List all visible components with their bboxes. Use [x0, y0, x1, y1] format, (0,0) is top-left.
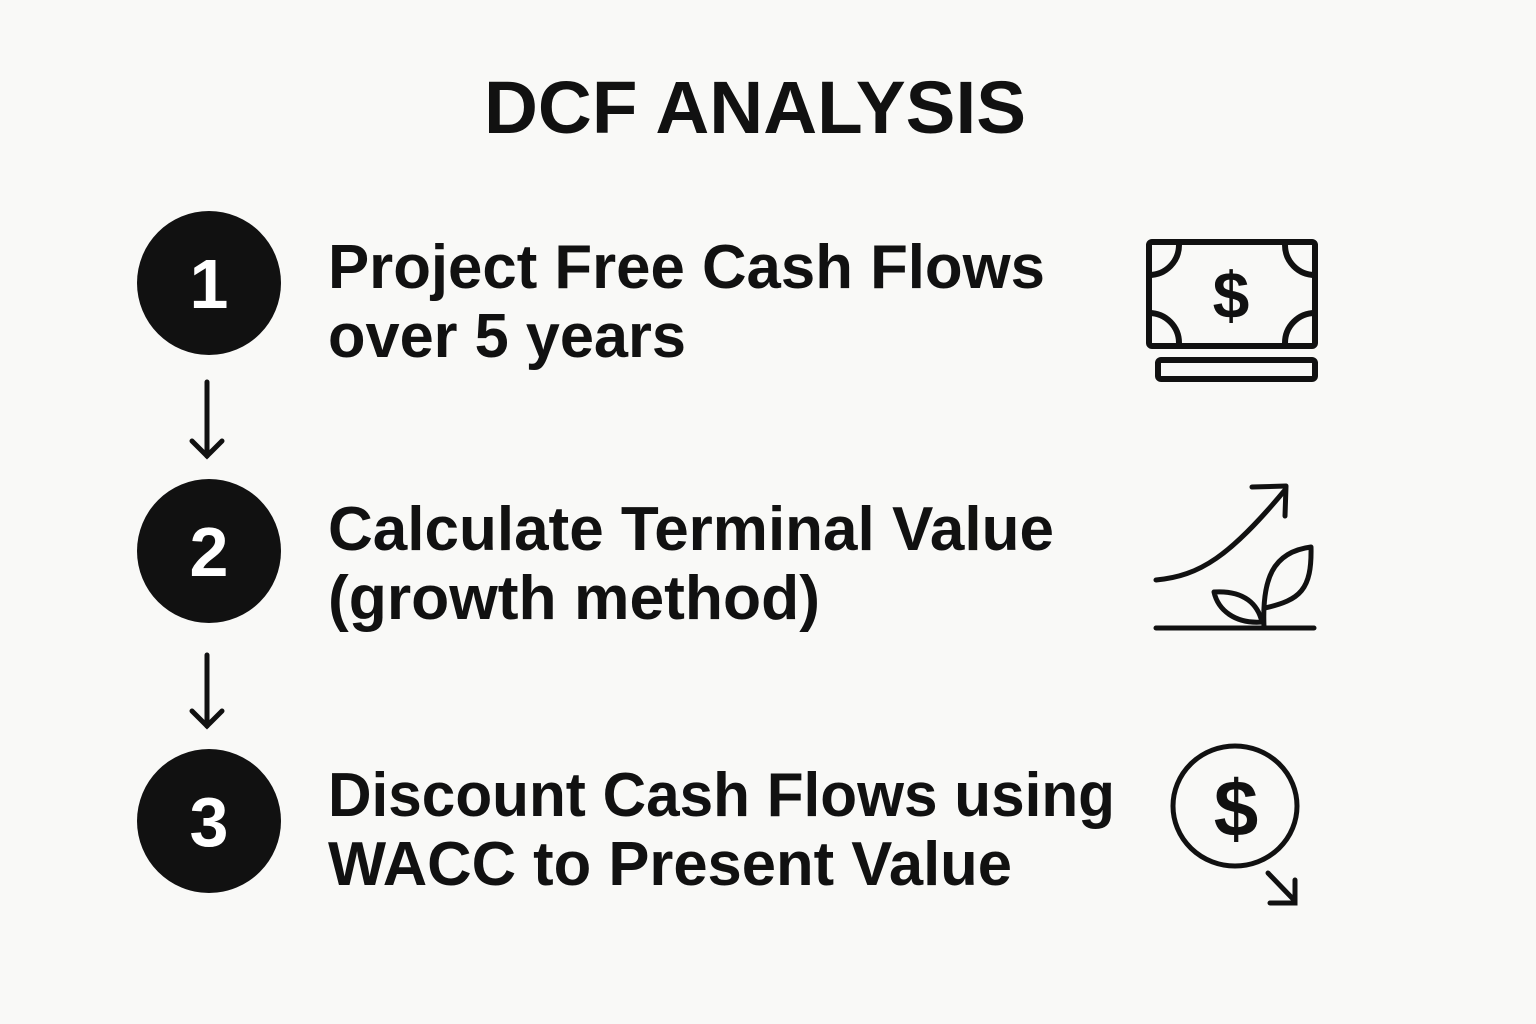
text 1: over 5 years — [328, 302, 686, 371]
text 2 — [328, 495, 1054, 633]
title: DCF ANALYSIS — [484, 66, 1026, 149]
icon: banknote — [1149, 242, 1315, 379]
text 3 — [328, 761, 1115, 899]
badge 2: 2 — [190, 513, 228, 591]
text 3: WACC to Present Value — [328, 830, 1012, 899]
text 1: Project Free Cash Flows — [328, 233, 1045, 302]
icon: banknote: $ — [1213, 258, 1249, 332]
badge 2 — [137, 479, 281, 623]
badge 3: 3 — [190, 783, 228, 861]
icon: growth plant — [1156, 486, 1314, 628]
arrow 1 to 2 — [192, 382, 222, 456]
text 2: Calculate Terminal Value — [328, 495, 1054, 564]
text 3: Discount Cash Flows using — [328, 761, 1115, 830]
step 2 — [137, 479, 1054, 633]
badge 1 — [137, 211, 281, 355]
badge 3 — [137, 749, 281, 893]
step 1 — [137, 211, 1045, 371]
icon: discount coin: $ — [1214, 764, 1258, 853]
arrow 2 to 3 — [192, 655, 222, 726]
badge 1: 1 — [190, 245, 228, 323]
text 2: (growth method) — [328, 564, 820, 633]
icon: discount coin — [1173, 746, 1297, 903]
text 1 — [328, 233, 1045, 371]
step 3 — [137, 749, 1115, 899]
